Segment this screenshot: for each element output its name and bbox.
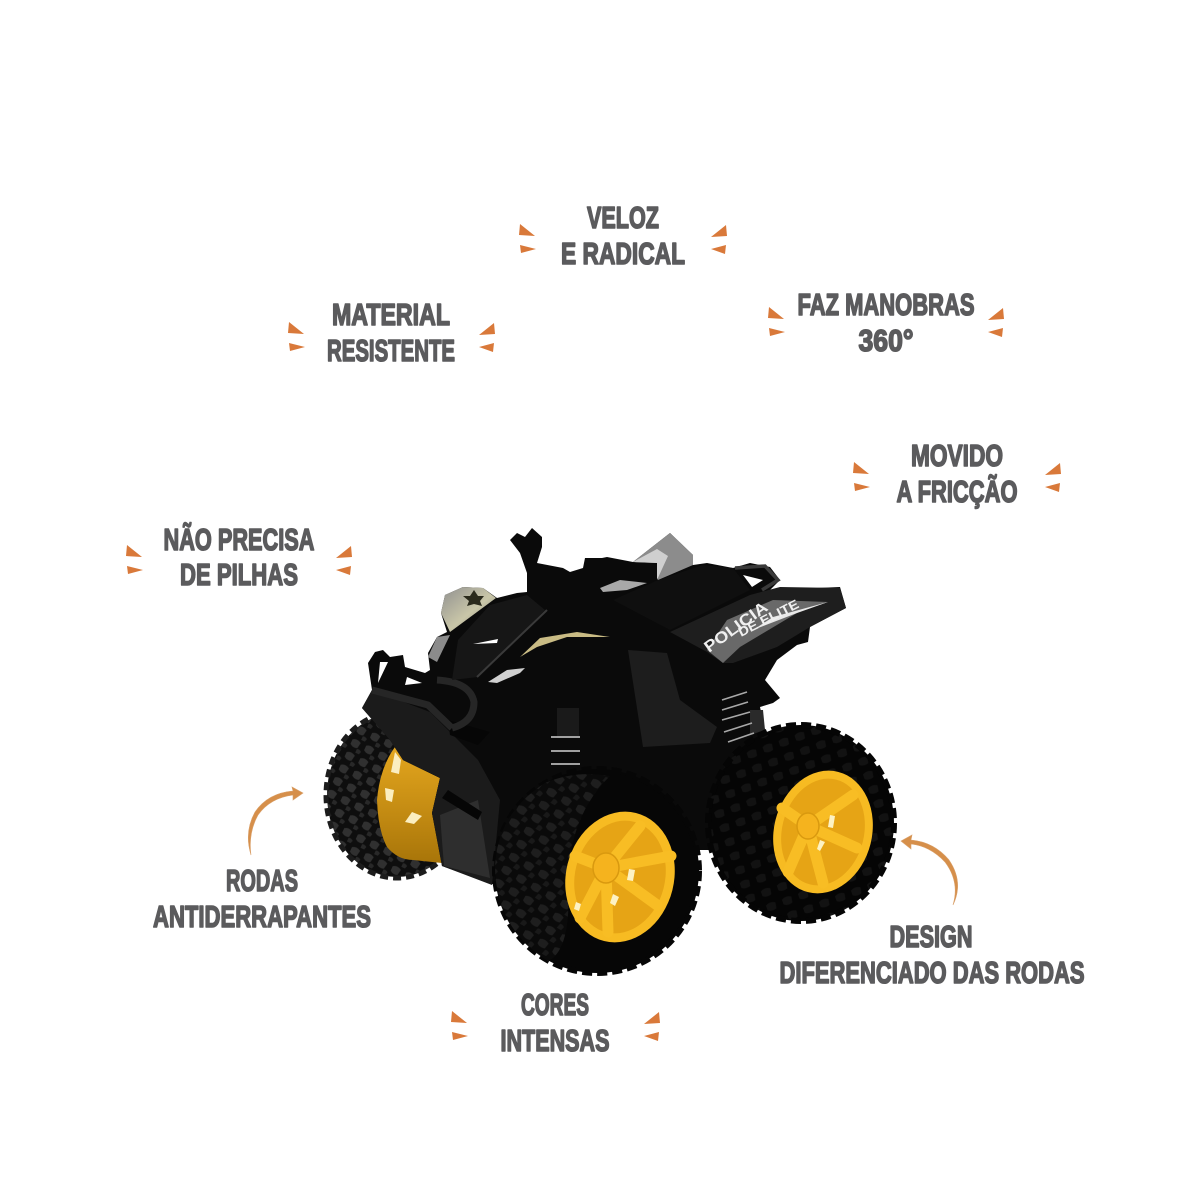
helmet dome <box>441 587 496 632</box>
rear fender <box>670 587 846 663</box>
label: movido a fricção: MOVIDO <box>911 438 1003 473</box>
label: não precisa de pilhas: DE PILHAS <box>180 557 298 592</box>
seat <box>613 565 750 630</box>
hood white gap <box>473 639 498 644</box>
chassis shadow slots <box>442 720 490 820</box>
fender police text: POLICIA <box>701 599 772 656</box>
right wheel <box>708 725 894 921</box>
gold hood stripe <box>520 632 610 657</box>
rear spring <box>722 692 754 742</box>
label: rodas antiderrapantes: ANTIDERRAPANTES <box>153 899 371 934</box>
fender grey decal <box>707 600 828 663</box>
wing decal <box>633 549 668 580</box>
label: design diferenciado das rodas: DESIGN <box>890 919 972 954</box>
fender de elite text: DE ELITE <box>736 596 801 640</box>
label: faz manobras 360: 360° <box>858 323 914 358</box>
bumper white gaps <box>378 662 422 685</box>
label: material resistente: RESISTENTE <box>327 333 455 368</box>
label: cores intensas: INTENSAS <box>500 1023 610 1058</box>
rear left wheel <box>326 712 468 878</box>
rear shock <box>750 710 765 735</box>
side panel <box>628 650 717 747</box>
label: faz manobras 360 <box>768 287 1004 358</box>
front bumper <box>372 680 474 728</box>
seat tag <box>600 580 647 592</box>
label: veloz e radical: E RADICAL <box>561 236 685 271</box>
label: movido a fricção: A FRICÇÃO <box>896 474 1018 509</box>
label: não precisa de pilhas: NÃO PRECISA <box>164 522 314 557</box>
label: rodas antiderrapantes <box>153 863 371 934</box>
label: material resistente <box>288 297 495 368</box>
hood panel <box>452 595 545 680</box>
body silhouette <box>362 528 846 900</box>
front wheel <box>495 769 699 973</box>
lower chassis left <box>362 690 500 885</box>
front spring <box>551 737 580 764</box>
rear handle <box>735 566 778 590</box>
label: movido a fricção <box>853 438 1061 509</box>
hood highlight <box>488 668 525 683</box>
arrow: to right wheel <box>901 835 958 905</box>
hood edge line <box>477 610 547 677</box>
label: cores intensas: CORES <box>521 987 589 1022</box>
rear handle gap <box>743 575 763 587</box>
dome star emblem <box>463 590 484 606</box>
rear chrome wing <box>633 533 693 580</box>
front tire tread <box>495 774 610 961</box>
label: veloz e radical <box>519 200 727 271</box>
label: design diferenciado das rodas <box>780 919 1084 990</box>
label: cores intensas <box>451 987 660 1058</box>
headlight <box>428 635 450 662</box>
right rim <box>760 760 886 904</box>
fender white strip <box>753 602 828 630</box>
vehicle: toy quad bike <box>326 528 894 973</box>
label: design diferenciado das rodas: DIFERENCIADO DAS RODAS <box>780 955 1084 990</box>
label: material resistente: MATERIAL <box>332 297 450 332</box>
chassis grey side plate <box>440 800 490 878</box>
label: não precisa de pilhas <box>126 522 352 592</box>
front shock <box>557 708 579 738</box>
label: faz manobras 360: FAZ MANOBRAS <box>798 287 974 322</box>
front rim <box>552 800 688 954</box>
arrow: to left wheel <box>248 787 303 855</box>
label: rodas antiderrapantes: RODAS <box>226 863 298 898</box>
label: veloz e radical: VELOZ <box>587 200 659 235</box>
